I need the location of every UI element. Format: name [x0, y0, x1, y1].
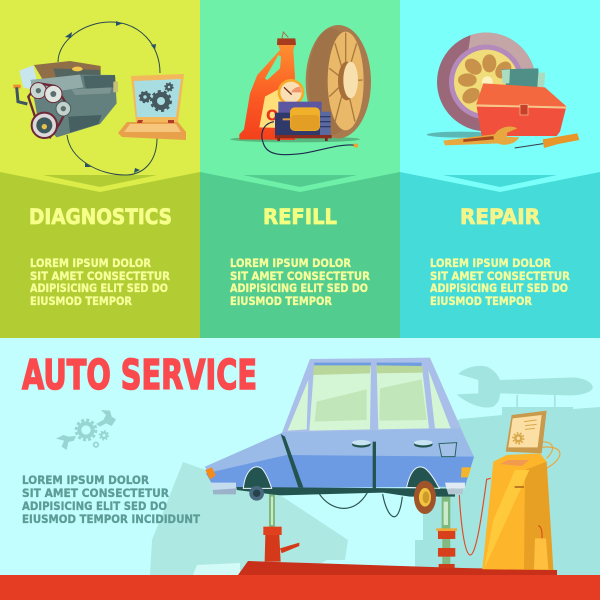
text block: diagnostics: SIT AMET CONSECTETUR [30, 269, 170, 283]
text block: refill: EIUSMOD TEMPOR [230, 294, 332, 308]
toolbox [476, 68, 567, 136]
heading: refill: REFILL [263, 205, 337, 229]
background silhouette: wrench sign [457, 366, 593, 408]
panel: refill [200, 0, 400, 338]
text block: repair: LOREM IPSUM DOLOR [430, 256, 551, 270]
heading: diagnostics: DIAGNOSTICS [29, 205, 172, 229]
bumpers and lights [205, 467, 471, 494]
pressure gauge [278, 79, 304, 106]
panel: auto service banner [0, 338, 600, 600]
text block: diagnostics: LOREM IPSUM DOLOR [30, 256, 151, 270]
text block: diagnostics: ADIPISICING ELIT SED DO [30, 281, 168, 295]
oil bottle [239, 32, 296, 140]
screwdriver [515, 133, 579, 148]
front wheel [249, 486, 264, 501]
compressor [275, 102, 332, 141]
text block: refill: SIT AMET CONSECTETUR [230, 269, 370, 283]
car on lift [205, 358, 474, 568]
floor [0, 575, 600, 600]
lift platform [238, 561, 557, 575]
door handles [352, 440, 433, 448]
icon: laptop with gears [118, 74, 186, 140]
kiosk body [482, 453, 553, 570]
air hose [262, 122, 358, 155]
red cable [459, 478, 491, 555]
panel: diagnostics [0, 0, 200, 338]
rear wheel [414, 481, 436, 514]
text block: banner [22, 473, 200, 526]
wheel [306, 25, 371, 138]
undercarriage [237, 487, 455, 497]
icon: gears and wrenches [56, 410, 116, 450]
kiosk monitor [506, 411, 547, 453]
text block: banner: EIUSMOD TEMPOR INCIDIDUNT [22, 512, 200, 526]
background silhouette: building [415, 407, 600, 575]
cycle arrows [58, 21, 160, 175]
icon: oil, wheel, compressor [230, 25, 371, 155]
text block: diagnostics: EIUSMOD TEMPOR [30, 294, 132, 308]
wheel arches [243, 467, 272, 488]
panel: repair [400, 0, 600, 338]
text block: refill: ADIPISICING ELIT SED DO [230, 281, 368, 295]
text block: banner: LOREM IPSUM DOLOR [22, 473, 149, 487]
oil bottle: Oil [266, 108, 289, 125]
text block: banner: SIT AMET CONSECTETUR [22, 486, 169, 500]
text block: refill: LOREM IPSUM DOLOR [230, 256, 351, 270]
text block: banner: ADIPISICING ELIT SED DO [22, 499, 167, 513]
service kiosk [459, 411, 560, 570]
text block: repair: ADIPISICING ELIT SED DO [430, 281, 568, 295]
tyre [437, 33, 536, 131]
text block: refill [230, 256, 370, 308]
text block: repair [430, 256, 570, 308]
title: AUTO SERVICE [22, 351, 257, 399]
right lift post [436, 497, 457, 568]
heading: repair: REPAIR [460, 205, 540, 229]
car body [205, 428, 474, 488]
wrench [443, 127, 519, 145]
text block: diagnostics [30, 256, 170, 308]
yellow cables [542, 442, 560, 468]
door seams [281, 434, 303, 487]
icon: engine [13, 61, 118, 138]
left lift jack [263, 493, 299, 562]
background silhouette: car [150, 462, 348, 575]
car cabin [282, 358, 474, 457]
gears on screen [140, 83, 173, 110]
text block: repair: SIT AMET CONSECTETUR [430, 269, 570, 283]
hanging cables [319, 493, 402, 517]
icon: tyre, toolbox, wrench, screwdriver [427, 33, 579, 148]
text block: repair: EIUSMOD TEMPOR [430, 294, 532, 308]
